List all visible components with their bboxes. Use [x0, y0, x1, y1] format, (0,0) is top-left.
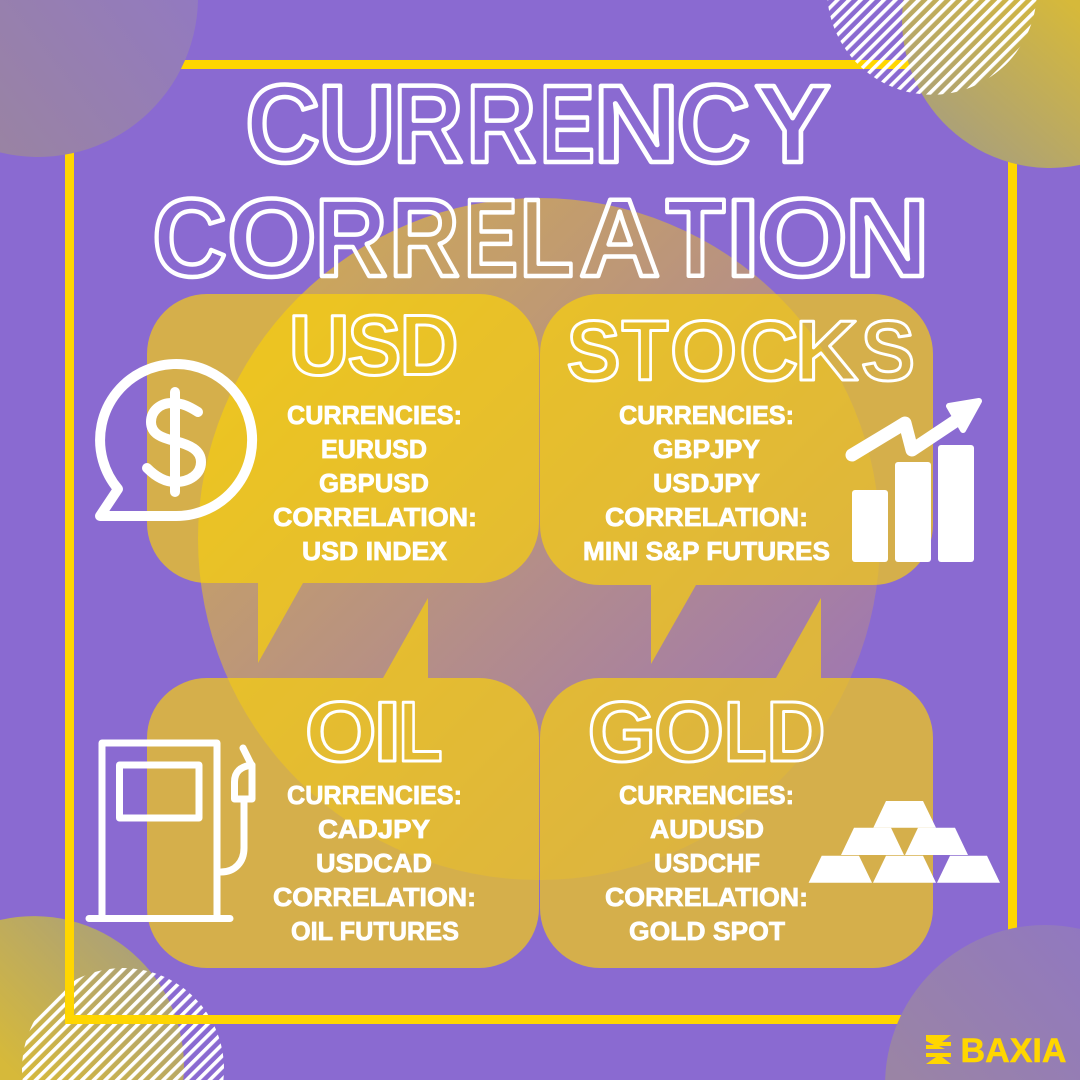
text: stocks details: CURRENCIES:: [619, 400, 794, 430]
title: E: [540, 63, 595, 186]
heading: gold: O: [654, 685, 724, 780]
icon: bar chart with arrow: [852, 401, 979, 562]
heading: gold: D: [766, 685, 826, 780]
text: oil details: USDCAD: [316, 848, 432, 878]
text: oil details: [273, 780, 476, 946]
speech bubble: oil: [147, 598, 539, 968]
heading: stocks: T: [622, 304, 668, 399]
text: gold details: CURRENCIES:: [619, 780, 794, 810]
title: R: [466, 63, 536, 186]
icon: fuel pump: [89, 743, 252, 918]
text: USD details: USD INDEX: [302, 536, 448, 566]
title: U: [318, 63, 395, 186]
title: O: [227, 177, 317, 300]
decorative circle: top right: [902, 0, 1080, 168]
logo: BAXIA: BAXIA: [960, 1032, 1066, 1070]
text: stocks details: USDJPY: [653, 468, 760, 498]
heading: stocks: [567, 304, 915, 399]
heading: oil: [305, 685, 443, 780]
title: Y: [755, 63, 831, 186]
text: oil details: CORRELATION:: [273, 882, 476, 912]
speech bubble: USD: [147, 294, 539, 663]
heading: gold: L: [724, 685, 767, 780]
title: N: [593, 63, 680, 186]
icon: gold bars: [809, 801, 1000, 883]
text: oil details: OIL FUTURES: [291, 916, 459, 946]
text: USD details: EURUSD: [321, 434, 427, 464]
title: L: [520, 177, 574, 300]
title: C: [245, 63, 320, 186]
heading: oil: I: [373, 685, 402, 780]
yellow frame: [70, 64, 1012, 1020]
text: USD details: CURRENCIES:: [287, 400, 462, 430]
heading: USD: D: [400, 298, 458, 394]
icon: dollar speech bubble: [100, 364, 252, 516]
hatched circle: top right: [828, 0, 1036, 95]
speech bubble: stocks: [540, 294, 933, 664]
text: stocks details: MINI S&P FUTURES: [583, 536, 830, 566]
title: C: [152, 177, 227, 300]
title: R: [389, 177, 460, 300]
heading: gold: G: [588, 685, 656, 780]
text: gold details: CORRELATION:: [605, 882, 808, 912]
heading: stocks: K: [795, 304, 858, 399]
heading: USD: [289, 298, 458, 394]
heading: stocks: S: [861, 304, 915, 399]
text: USD details: CORRELATION:: [273, 502, 477, 532]
text: oil details: CURRENCIES:: [287, 780, 462, 810]
title: R: [393, 63, 463, 186]
title: A: [579, 177, 660, 300]
panel: USD: [100, 294, 539, 663]
heading: stocks: C: [739, 304, 798, 399]
heading: oil: L: [398, 685, 443, 780]
title: E: [464, 177, 518, 300]
title: [152, 63, 930, 300]
text: stocks details: GBPJPY: [653, 434, 760, 464]
heading: stocks: S: [567, 304, 621, 399]
text: gold details: USDCHF: [654, 848, 760, 878]
icon: logo mark: [926, 1035, 951, 1064]
heading: gold: [588, 685, 826, 780]
decorative circle: bottom left: [0, 916, 184, 1080]
title: O: [758, 177, 848, 300]
text: USD details: GBPUSD: [319, 468, 429, 498]
text: gold details: GOLD SPOT: [629, 916, 785, 946]
text: oil details: CADJPY: [318, 814, 430, 844]
heading: USD: S: [347, 298, 401, 394]
heading: USD: U: [289, 298, 350, 394]
title: N: [845, 177, 930, 300]
central circle: [198, 198, 880, 880]
decorative circle: bottom right: [885, 925, 1080, 1080]
text: gold details: [605, 780, 808, 946]
panel: stocks: [540, 294, 979, 664]
heading: oil: O: [305, 685, 377, 780]
text: stocks details: [583, 400, 830, 566]
hatched circle: bottom left: [22, 968, 224, 1080]
panel: gold: [540, 598, 1000, 968]
text: gold details: AUDUSD: [650, 814, 764, 844]
title: C: [676, 63, 750, 186]
panel: oil: [89, 598, 539, 968]
speech bubble: gold: [540, 598, 933, 968]
heading: stocks: O: [670, 304, 737, 399]
decorative circle: top left: [0, 0, 198, 157]
title: I: [726, 177, 760, 300]
text: stocks details: CORRELATION:: [605, 502, 808, 532]
title: T: [666, 177, 725, 300]
title: R: [315, 177, 387, 300]
text: USD details: [273, 400, 477, 566]
